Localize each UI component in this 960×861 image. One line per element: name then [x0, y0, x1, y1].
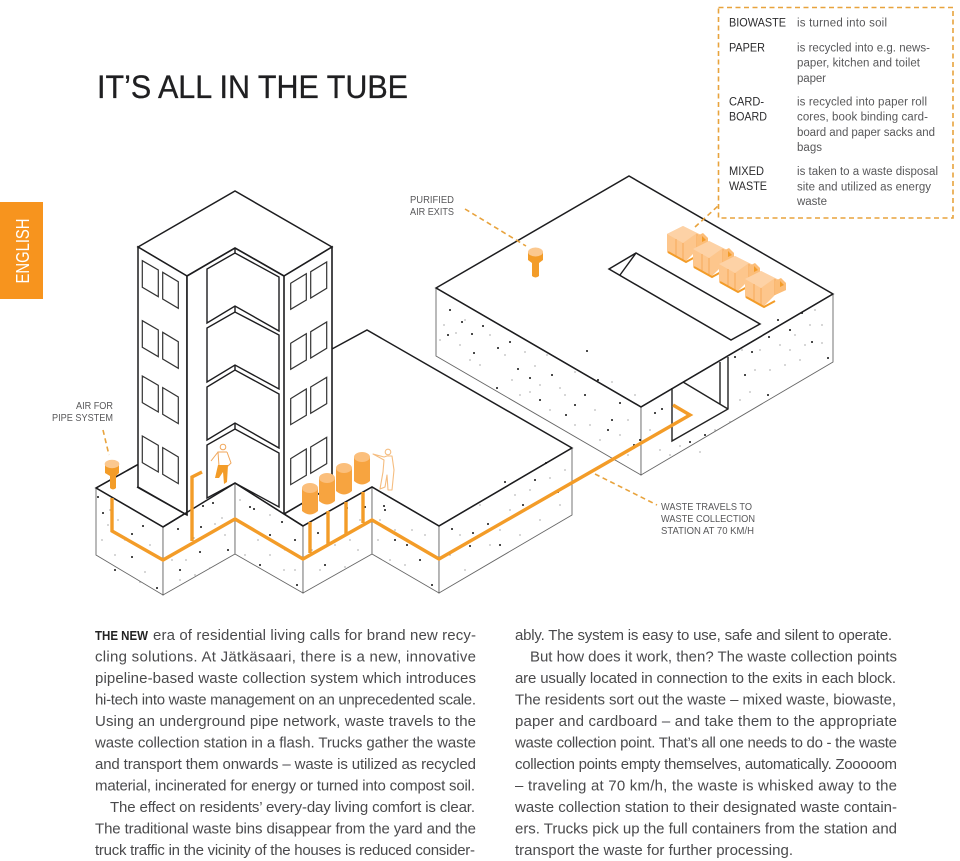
pipe air intake vent — [105, 460, 119, 490]
callout: waste types legend: is recycled into paper roll — [797, 96, 927, 108]
waste bins — [302, 452, 370, 514]
body text: right column: paper and cardboard – and take them to the appropriate — [515, 713, 897, 730]
body text: left column: waste collection station in a flash. Trucks gather the waste — [94, 734, 476, 752]
title: IT’S ALL IN THE TUBE — [97, 69, 408, 105]
callout: waste types legend: paper — [797, 73, 826, 85]
tower building — [138, 191, 332, 515]
truck 4 — [745, 271, 786, 307]
body text: left column: The traditional waste bins disappear from the yard and the — [95, 820, 476, 838]
body text: right column: ers. Trucks pick up the full containers from the station and — [515, 820, 897, 838]
residential ground block — [96, 330, 572, 595]
language tab: English: ENGLISH — [13, 218, 33, 284]
body text: right column: But how does it work, then? The waste collection points — [530, 648, 897, 666]
body text: left column: Using an underground pipe network, waste travels to the — [95, 713, 476, 730]
body text: left column: material, incinerated for energy or turned into compost soil. — [95, 778, 475, 794]
label: waste travels to station: WASTE TRAVELS TO — [661, 501, 752, 513]
label: waste travels to station — [661, 501, 755, 537]
body text: left column: hi-tech into waste management on an unprecedented scale. — [95, 692, 476, 708]
body text: left column: era of residential living calls for brand new recy- — [153, 627, 476, 644]
body text: left column — [94, 627, 476, 859]
callout: waste types legend: WASTE — [729, 181, 767, 193]
tower right wall with windows — [284, 247, 332, 514]
body text: right column: The residents sort out the waste – mixed waste, biowaste, — [515, 692, 896, 708]
callout: waste types legend: PAPER — [729, 42, 765, 54]
body text: right column: transport the waste for further processing. — [515, 842, 793, 859]
leader: purified air — [465, 209, 526, 246]
body text: right column: waste collection station to their designated waste contain- — [514, 799, 897, 816]
callout: waste types legend: board and paper sacks and — [797, 127, 935, 139]
body text: right column: ably. The system is easy to use, safe and silent to operate. — [515, 627, 892, 644]
callout: waste types legend: BIOWASTE — [729, 18, 786, 30]
callout: waste types legend: BOARD — [729, 112, 767, 124]
callout: waste types legend: bags — [797, 142, 822, 154]
body text: left column: THE NEW — [95, 629, 148, 643]
tower roof — [138, 191, 332, 276]
body text: left column: and transport them onwards – waste is utilized as recycled — [95, 756, 476, 773]
figure: resident inside tower — [211, 444, 231, 484]
loading slot in roof — [609, 253, 760, 340]
leader: air intake — [103, 430, 109, 455]
leader: waste travels — [595, 474, 657, 505]
purified air exit vent — [528, 248, 543, 278]
ground edge in front of tower — [96, 465, 303, 527]
body text: right column: are usually located in connection to the exits in each block. — [515, 670, 896, 687]
body text: left column: truck traffic in the vicinity of the houses is reduced consider- — [95, 842, 475, 859]
label: purified air exits: PURIFIED — [410, 194, 454, 206]
callout: waste types legend: waste — [796, 196, 827, 208]
callout: waste types legend: CARD- — [729, 96, 764, 108]
callout: waste types legend — [718, 8, 953, 218]
label: air for pipe system: AIR FOR — [76, 400, 113, 412]
callout: waste types legend: site and utilized as energy — [797, 182, 931, 194]
callout: waste types legend: MIXED — [729, 166, 764, 178]
label: air for pipe system: PIPE SYSTEM — [52, 412, 113, 424]
body text: right column: – traveling at 70 km/h, the waste is whisked away to the — [515, 778, 897, 794]
callout: waste types legend: paper, kitchen and toilet — [797, 58, 921, 70]
delivery trucks — [667, 226, 786, 307]
leader: trucks to legend — [695, 206, 718, 227]
tower left wall with windows — [138, 247, 187, 515]
tower inner recess with floors — [187, 248, 284, 515]
callout: waste types legend: is recycled into e.g. news- — [797, 42, 930, 54]
body text: left column: cling solutions. At Jätkäsaari, there is a new, innovative — [95, 648, 476, 666]
truck 1 — [667, 226, 708, 262]
callout: waste types legend: cores, book binding card- — [797, 112, 928, 124]
label: waste travels to station: STATION AT 70 KM/H — [661, 525, 754, 537]
tunnel opening — [672, 357, 728, 441]
truck 2 — [693, 241, 734, 277]
label: purified air exits: AIR EXITS — [410, 206, 454, 218]
label: purified air exits — [410, 194, 454, 218]
collection station block — [436, 176, 833, 475]
label: air for pipe system — [52, 400, 113, 424]
body text: left column: The effect on residents’ every-day living comfort is clear. — [110, 799, 475, 816]
underground pipe network — [112, 405, 690, 560]
body text: right column: waste collection point. That’s all one needs to do - the waste — [514, 734, 897, 752]
figure: resident at bins — [373, 449, 394, 490]
language tab: English — [0, 202, 43, 299]
label: waste travels to station: WASTE COLLECTION — [661, 513, 755, 525]
callout: waste types legend: is taken to a waste disposal — [797, 166, 938, 178]
body text: right column — [514, 627, 897, 859]
callout: waste types legend: is turned into soil — [797, 18, 887, 30]
body text: right column: collection points empty themselves, automatically. Zooooom — [515, 756, 897, 773]
truck 3 — [719, 256, 760, 292]
roof front edges — [436, 288, 833, 407]
body text: left column: pipeline-based waste collection system which introduces — [95, 670, 476, 687]
